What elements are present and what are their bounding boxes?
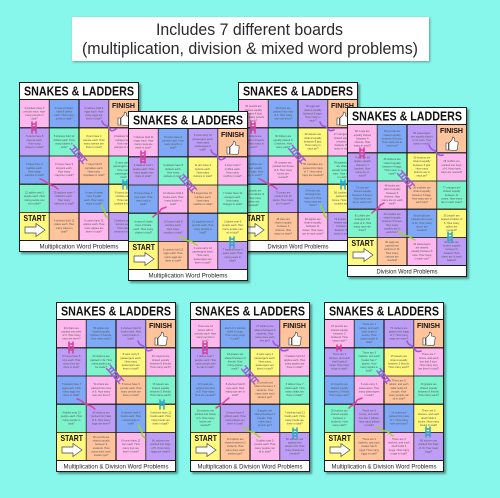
question grid: 12 tables seat 3 people each. How many people can sit in total?	[24, 191, 45, 205]
start square: START	[352, 238, 375, 248]
snake: green	[243, 428, 260, 437]
footer label: Multiplication & Division Word Problems	[332, 464, 436, 470]
snake: purple	[429, 145, 443, 155]
question grid: 8 boxes have 8 toys each. How many toys are there in total?	[62, 355, 80, 369]
question grid: 4 shelves hold 12 cakes each. How many cakes in total?	[54, 220, 74, 233]
snake: green	[102, 205, 108, 218]
question grid: 36 folders are equally placed in 3 shelves. How many each?	[273, 135, 293, 149]
question grid	[129, 129, 247, 269]
start square	[352, 238, 375, 262]
game pieces	[242, 101, 354, 237]
ladder: purple	[377, 368, 390, 384]
question grid: 14 chairs are packed into rows of 7. How many rows are there?	[389, 411, 409, 425]
game pieces	[132, 130, 244, 266]
question grid: 22 crayons are shared equally between 2 friends. How many each?	[329, 383, 350, 397]
question grid: 96 eggs are packed into cartons of 12. How many cartons are needed?	[384, 241, 400, 262]
question grid: 77 oranges are shared equally between 11 crates. How many are in each crate?	[441, 186, 462, 204]
ladder: pink	[32, 122, 36, 133]
question grid	[348, 125, 466, 265]
question grid: 36 pencils are shared equally between 4 kids. How many pencils each?	[243, 105, 264, 122]
finish square: FINISH	[149, 321, 172, 330]
question grid: 6 vans carry 2 passengers each. How many passengers are there in total?	[254, 353, 275, 370]
question grid: 7 shelves hold 11 books each. How many books are there in total?	[284, 411, 305, 425]
finish square: FINISH	[417, 321, 440, 330]
ladder: pink	[141, 151, 145, 163]
question grid: 4 trays hold 7 muffins each. How many muffins in total?	[223, 164, 242, 178]
question grid: 20 pencils are shared between 2 students. How many does each student get?	[254, 381, 275, 399]
panel: multiplication board back	[19, 82, 139, 252]
question grid: 18 crayons are packed into boxes of 9. How many boxes are needed?	[195, 410, 216, 427]
question grid: There are 5 tables, and each table seats 12 people. How many people can sit in total?	[389, 380, 409, 400]
question grid: 54 chairs are packed into rows of 6. How many rows are there?	[91, 383, 111, 397]
question grid: 15 sweets are shared equally between 3 friends. How many each?	[388, 355, 410, 369]
question grid: There are 4 baskets, and each basket has 8 eggs. How many eggs in total?	[358, 438, 380, 455]
question grid: 32 books are packed into bins of 8. How many bins are needed?	[195, 383, 216, 397]
footer label	[129, 270, 247, 280]
question grid: 4 tables seat 12 people each. How many people in total?	[61, 411, 82, 425]
question grid: 4 pockets have 9 pencils each. How many pencils in total?	[24, 107, 45, 120]
question grid: 5 boxes have 5 pencils each. How many pencils are there in total?	[120, 383, 142, 397]
question grid: 48 cans are shared equally between 4 shelves. How many on each?	[274, 218, 292, 235]
question grid: 10 packets have 7 balloons each. How many balloons in total?	[53, 191, 75, 205]
question grid: 7 baskets hold 12 apples each. How many apples are there in total?	[284, 355, 305, 369]
finish square: FINISH	[283, 321, 306, 330]
ladder: pink	[69, 342, 73, 353]
question grid: 9 packets have 8 stickers each. How many stickers in total?	[163, 164, 183, 178]
question grid: 72 toys are shared equally between 8 boxes. How many toys are in each box?	[352, 186, 373, 204]
snake: purple	[320, 122, 334, 131]
footer label	[57, 461, 175, 471]
question grid	[20, 100, 138, 240]
question grid: 6 baskets hold 7 apples each. How many apples are there in total?	[133, 164, 154, 178]
ladder: teal	[448, 232, 452, 242]
question grid: 60 passengers are equally placed in 12 vans. How many in each?	[411, 132, 433, 145]
question grid: 8 apples are shared between 4 friends. How many each person get?	[254, 410, 275, 427]
start square: START	[24, 213, 47, 223]
finish square	[283, 321, 306, 346]
question grid: 8 jars have 4 sweets each. How many sweets are there in total?	[83, 135, 105, 149]
question grid: 7 crates have 11 oranges each. How many oranges in total?	[223, 192, 242, 206]
ladder: pink	[203, 342, 207, 354]
footer label: Division Word Problems	[376, 269, 438, 275]
finish square	[112, 101, 135, 126]
ladder: teal	[293, 428, 297, 438]
question grid: 48 chairs are packed into rows of 6. How many rows are there?	[273, 107, 293, 120]
question grid: 70 pears are packed into 10 packs. How many are in each?	[273, 191, 294, 205]
finish square	[149, 321, 172, 346]
finish square: FINISH	[221, 130, 244, 139]
ladder: teal	[341, 180, 345, 189]
start square	[328, 433, 352, 456]
question grid: 9 baskets hold 8 oranges each. How many oranges in total?	[114, 135, 133, 149]
question grid: 32 sweets are shared equally between 8 jars. How many in each jar?	[304, 133, 322, 150]
ladder: purple	[107, 365, 123, 384]
question grid: 12 boxes hold 8 candles each. How many candles in total?	[164, 220, 183, 234]
panel: multiplication board front	[128, 111, 248, 281]
game pieces	[24, 101, 135, 237]
question grid: 3 shelves have 11 books each. How many books are there in total?	[150, 411, 171, 425]
question grid	[325, 320, 443, 460]
question grid: 4 shelves hold 11 books each. How many books in total?	[121, 327, 141, 340]
question grid: 60 stickers are packed into bags of 5. How many bags are made?	[151, 440, 171, 453]
question grid	[239, 100, 357, 240]
question grid: 10 packets have 6 pencils each. How many pencils in total?	[192, 220, 214, 234]
snake: green	[376, 427, 393, 436]
snake: purple	[273, 341, 288, 351]
question grid: 30 eggs are shared equally between 5 trays. How many in each?	[303, 105, 323, 122]
question grid: 5 shelves hold 12 folders each. How many folders in total?	[54, 135, 75, 149]
question grid: There are 63 apples equally shared in 7 baskets. How many are in each?	[354, 156, 371, 177]
ladder: pink	[360, 148, 364, 158]
finish square	[221, 130, 244, 154]
snake: purple	[211, 150, 225, 160]
finish square: FINISH	[331, 101, 354, 110]
question grid: 8 boxes hold 9 cookies each. How many cookies in total?	[114, 191, 133, 205]
title banner	[72, 16, 432, 64]
footer label: Multiplication Word Problems	[40, 244, 118, 250]
question grid: There are 3 baskets, and each basket has 7 apples. How many apples in total?	[358, 351, 380, 372]
start square	[132, 242, 156, 266]
snake: pink	[349, 398, 362, 408]
question grid: There are 6 boxes, and each box has 2 pillows. How many pillows in total?	[359, 410, 380, 427]
footer label	[325, 461, 443, 471]
question grid: 12 shelves hold 4 books each. How many books in total?	[163, 192, 183, 206]
question grid: 9 baskets hold 7 lemons each. How many lemons in total?	[114, 220, 133, 233]
question grid	[191, 320, 309, 460]
question grid: Each of 4 shelves holds 6 mugs. How many mugs in total?	[225, 327, 246, 340]
game pieces	[328, 321, 440, 457]
question grid: 24 folders are shared in 4 hearts of 6. How many in each?	[243, 135, 264, 149]
question grid: 5 bags have 4 marbles each. How many marbles in total?	[25, 163, 44, 177]
snake: green	[139, 425, 145, 438]
question grid: 99 chairs are packed into rows of 9. How many rows are there?	[61, 327, 81, 340]
snake: pink	[40, 179, 58, 189]
panel: mixed board left	[56, 302, 176, 472]
start square	[194, 433, 218, 456]
question grid: 60 pencils are packed into boxes of 10. How many boxes are needed?	[411, 215, 433, 232]
question grid: 66 apples are shared equally between 11 crates. How many are in each crate?	[302, 218, 323, 235]
question grid: 5 vans carry 7 passengers each. How many passengers in total?	[113, 161, 134, 179]
snake: pink	[259, 179, 277, 189]
question grid: 11 jars have 3 buttons each. How many buttons in total?	[194, 164, 212, 178]
game pieces	[60, 321, 172, 457]
question grid: 5 tables seat 5 people each. How many people can sit in total?	[254, 440, 275, 453]
finish square: FINISH	[112, 101, 135, 110]
start square: START	[242, 213, 266, 223]
question grid: 9 rows of chairs have 9 chairs each. How many chairs in total?	[134, 220, 153, 234]
snake: green	[321, 205, 327, 218]
panel: mixed board right	[324, 302, 444, 472]
question grid: 6 vans carry 4 passengers. How many passengers in total?	[359, 383, 380, 397]
question grid: 42 passengers are shared equally between 6 vans. How many in each van?	[411, 243, 433, 260]
title banner: Includes 7 different boards	[156, 21, 343, 39]
start square: START	[132, 242, 156, 252]
question grid: 55 passengers are shared equally between 5 vans. How many in each?	[332, 161, 353, 179]
question grid: 6 rows of desks have 8 desks each. How many desks in total?	[54, 107, 74, 120]
question grid: 24 stickers are packed in 3s. How many packs can be made?	[90, 355, 112, 369]
question grid: 7 baskets have 7 eggs each. How many eggs are there in total?	[61, 383, 81, 397]
question grid: There are 2 tables, and each table seats 3 people. How many people in total?	[359, 323, 379, 344]
footer label	[239, 241, 357, 251]
question grid: 8 boxes have 9 toys each. How many toys in total?	[134, 192, 152, 206]
snake: green	[398, 232, 415, 240]
question grid: 27 oranges are shared equally between 3 baskets. How many in each?	[334, 133, 351, 150]
ladder: purple	[398, 170, 414, 189]
question grid: 15 sweets are shared equally between 5 friends. How many each?	[150, 383, 171, 397]
question grid: 7 baskets have 6 pears each. How many pears in total?	[223, 249, 243, 262]
footer label: Multiplication & Division Word Problems	[64, 464, 168, 470]
snake: purple	[407, 341, 421, 352]
question grid: 7 tables seat 7 people each. How many people can be sat in total?	[195, 355, 216, 369]
finish square	[440, 126, 463, 150]
question grid: 27 stickers are shared between 9 students. How many does each one get?	[254, 325, 275, 342]
finish square	[417, 321, 440, 346]
snake: pink	[153, 207, 166, 217]
question grid: There are 11 boxes with 3 pencils each. How many pencils in total?	[195, 325, 216, 342]
question grid: 6 bags have 10 marbles each. How many marbles in total?	[193, 192, 213, 206]
panel: mixed board middle	[190, 302, 310, 472]
ladder: purple	[180, 174, 196, 193]
question grid: 35 people are seated at tables of 5. How many tables are needed?	[441, 215, 462, 232]
ladder: purple	[289, 145, 305, 164]
footer label	[20, 241, 138, 251]
question grid: 40 candles are shared equally between 5 boxes. How many candles are in each box?	[382, 213, 402, 234]
footer label	[348, 266, 466, 276]
footer label	[191, 461, 309, 471]
ladder: teal	[160, 400, 164, 409]
question grid: 80 stickers are packed into bags of 10. How many bags?	[419, 440, 439, 453]
question grid: 60 stickers are packed into bags of 6. How many bags are there?	[91, 411, 111, 425]
title banner: (multiplication, division & mixed word problems)	[82, 40, 418, 58]
question grid: 4 vans carry 12 passengers each. How many passengers are there in total?	[192, 247, 213, 264]
question grid: 60 mugs are equally shared between 4 shelves. How many in each?	[354, 130, 371, 147]
ladder: teal	[426, 427, 430, 437]
start square	[60, 433, 84, 456]
question grid: 55 apples are shared equally between 5 friends. How many each?	[90, 327, 112, 340]
question grid: 15 pencils are shared equally between 3 students. How many each?	[331, 325, 348, 342]
question grid: 6 boxes have 9 crayons each. How many crayons in total?	[55, 163, 74, 177]
question grid: There are 9 shelves, and each shelf holds 4 books. How many books in total?	[418, 410, 439, 427]
finish square	[331, 101, 354, 126]
question grid: 8 cartons hold 12 eggs each. How many eggs are there in total?	[163, 249, 183, 262]
question grid: 33 buttons are shared equally between 3 jars. How many buttons are in each jar?	[413, 156, 431, 177]
question grid: There are 3 shelves, and each shelf holds 8 mugs. How many mugs in total?	[329, 353, 350, 370]
question grid: 7 teams have 5 players each. How many players in total?	[25, 135, 44, 149]
question grid: 3 tables seat 9 people each. How many people can sit in total?	[222, 220, 243, 234]
question grid: 5 vans carry 12 passengers each. How many passengers in total?	[192, 134, 213, 151]
question grid: 16 grapes are shared equally between 8 friends. How many each?	[418, 383, 439, 397]
snake: pink	[216, 398, 229, 408]
snake: purple	[102, 121, 116, 131]
question grid: 90 pencils are shared equally between 9 students. How many does each student get?	[91, 436, 111, 457]
question grid: 70 stickers are packed into bags of 7. How many bags are there?	[389, 327, 409, 340]
question grid: 81 chairs are arranged into rows of 9. How many rows are there?	[354, 215, 371, 232]
finish square: FINISH	[440, 126, 463, 135]
question grid: There are 3 shelves, and each shelf holds 3 mugs. How many mugs in total?	[388, 438, 410, 455]
snake: pink	[372, 203, 384, 213]
question grid: 54 crayons are packed into boxes of 6. How many boxes are needed?	[272, 161, 294, 179]
question grid: 3 boxes have 5 pillows each. How many pillows are there in total?	[225, 411, 246, 425]
question grid: 20 marbles are packed equally into 5 bags. How many in each?	[244, 163, 263, 177]
ladder: pink	[251, 122, 255, 133]
question grid: 42 pears are shared equally between 6 baskets. How many are in each basket?	[442, 241, 462, 262]
question grid: There are 7 boxes, and each box has 5 toys. How many toys are there in total?	[418, 353, 439, 370]
ladder: teal	[230, 237, 234, 248]
footer label: Multiplication & Division Word Problems	[198, 464, 302, 470]
ladder: purple	[70, 145, 87, 164]
question grid: 48 pencils are shared equally between 8 boxes. How many are in each box?	[382, 130, 402, 147]
question grid: 10 buttons are shared between 2 students. How many does each student get?	[225, 438, 246, 455]
start square: START	[194, 433, 218, 443]
question grid: 56 cookies are packed into boxes. How many cookies each?	[332, 191, 353, 205]
question grid: 56 cupcakes are packed into trays of 7. How many trays are needed?	[302, 163, 324, 177]
question grid: 5 cartons hold 6 eggs each. How many eggs are there in total?	[84, 107, 103, 120]
footer label: Division Word Problems	[268, 244, 328, 250]
question grid: 36 stickers are shared equally between 4 bags. How many in each?	[382, 158, 402, 175]
question grid: 60 stickers are packed into sheets of 6. How many sheets are needed?	[285, 438, 304, 455]
question grid: 30 marbles are shared equally between 3 bags. How many are in each bag?	[412, 186, 432, 204]
question grid: 18 grapes are shared between 9 friends. How many grapes each?	[225, 353, 246, 370]
snake: pink	[77, 399, 95, 409]
question grid: 8 shelves hold 8 toys each. How many toys are in total?	[225, 383, 245, 397]
snake: green	[180, 237, 197, 245]
start square	[24, 213, 47, 236]
question grid: 7 trays hold 8 cupcakes each. How many cupcakes in total?	[83, 163, 104, 177]
snake: purple	[138, 341, 152, 351]
question grid: 7 shelves hold 11 mugs each. How many mugs are there in total?	[133, 136, 154, 149]
start square	[242, 213, 266, 236]
question grid: 8 shelves hold 9 books each. How many books in total?	[121, 411, 141, 425]
panel: division board back	[238, 82, 358, 252]
question grid: 54 seats are arranged into rows of 9. How many rows are there?	[304, 190, 322, 207]
panel: division board front	[347, 107, 467, 277]
footer label: Multiplication Word Problems	[148, 273, 228, 279]
start square: START	[60, 433, 84, 443]
question grid	[57, 320, 175, 460]
ladder: pink	[337, 345, 341, 351]
ladder: teal	[123, 180, 127, 189]
question grid: 20 buttons are shared equally between 2 students. How many each?	[331, 410, 348, 427]
ladder: purple	[242, 366, 258, 384]
game pieces	[194, 321, 306, 457]
question grid: 72 lemons are shared equally between 8 baskets. How many in each?	[334, 218, 351, 235]
question grid: 6 boxes have 11 toys each. How many toys are there in total?	[121, 440, 140, 453]
question grid: 9 rows of seats have 6 seats each. How many seats in total?	[84, 191, 104, 205]
question grid: 24 people are seated at tables of 4. How many tables are needed?	[243, 190, 264, 207]
start square: START	[328, 433, 352, 443]
question grid: 8 vans carry 5 passengers each. How many passengers are there in total?	[120, 353, 141, 370]
question grid: 3 tables have 7 chairs each. How many chairs are there in total?	[285, 383, 305, 397]
game pieces	[352, 126, 463, 262]
question grid: 28 muffins are packed into trays of 4. How many trays are needed?	[441, 160, 462, 174]
question grid: 40 crayons are shared equally between 8 friends. How many each?	[150, 355, 171, 369]
question grid: 48 books are placed equally between 8 shelves. How many are on each shelf?	[382, 185, 403, 205]
question grid: 8 boxes have 6 pencils each. How many pencils in total?	[162, 136, 184, 149]
question grid: 6 crates have 11 apples each. How many apples are there in total?	[83, 220, 104, 233]
